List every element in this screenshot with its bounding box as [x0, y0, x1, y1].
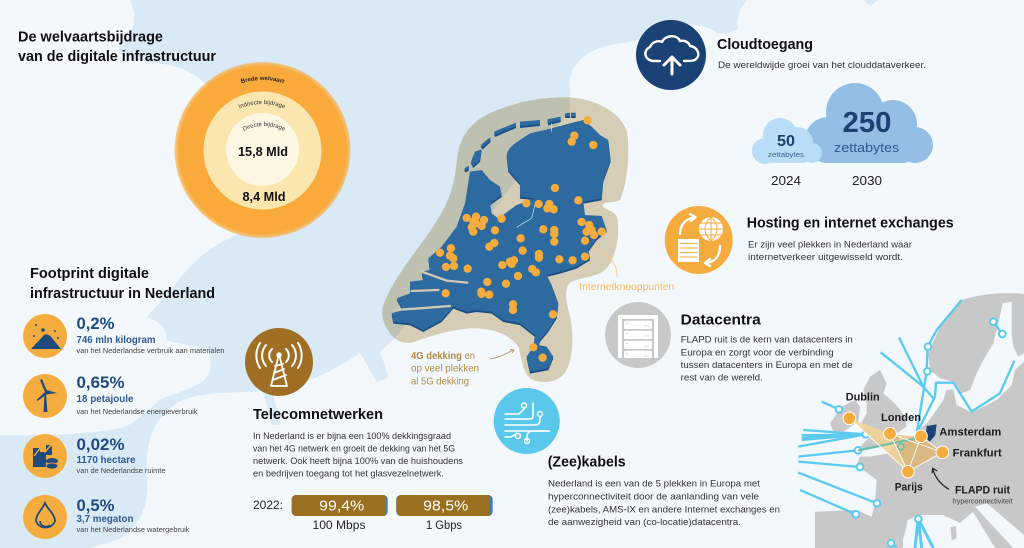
bar: 1 Gbps — [396, 495, 493, 532]
cloud: 250 zettabytes: zettabytes — [834, 140, 900, 155]
bar: 1 Gbps: 98,5% — [423, 498, 468, 515]
panel: cloudtoegang — [636, 20, 933, 188]
panel: datacentra: Datacentra — [681, 311, 761, 328]
map: Europa met kabels en FLAPD ruit — [798, 293, 1024, 548]
footprint row: materialen: van het Nederlandse verbruik aan materialen — [76, 348, 225, 355]
panel: telecomnetwerken: en bedrijven toegang tot het glasvezelnetwerk. — [253, 469, 444, 480]
panel: telecomnetwerken: van het 4G netwerk en groeit de dekking van het 5G — [253, 444, 455, 455]
label: 4G dekking: op veel plekken — [411, 363, 479, 375]
internet nodes — [436, 116, 606, 362]
footprint row: ruimte — [23, 434, 166, 478]
cloud: 50 zettabytes: zettabytes — [768, 150, 804, 159]
concentric circles: welvaartsbijdrage — [174, 62, 350, 238]
footprint row: water — [23, 495, 190, 539]
footprint row: ruimte: van de Nederlandse ruimte — [76, 468, 166, 475]
cable landing points — [836, 318, 1006, 547]
FLAPD diamond — [843, 412, 949, 478]
label: Londen: Londen — [881, 412, 921, 424]
panel: telecomnetwerken: Telecomnetwerken — [253, 406, 383, 423]
cloud: 50 zettabytes: 50 — [777, 133, 795, 150]
panel: cloudtoegang: 2030 — [852, 174, 882, 188]
footprint row: energie: van het Nederlandse energieverbruik — [76, 409, 198, 416]
bar: 100 Mbps: 100 Mbps — [312, 520, 366, 532]
footprint row: ruimte: 0,02% — [76, 435, 124, 454]
footprint row: materialen — [23, 314, 225, 358]
panel: datacentra: Europa en zorgt voor de verbinding — [681, 347, 834, 358]
cloud: 50 zettabytes — [752, 118, 822, 164]
bar: 1 Gbps: 1 Gbps — [426, 520, 462, 532]
land shadow and fill — [392, 113, 611, 374]
panel: telecomnetwerken — [245, 328, 493, 532]
land — [815, 293, 1024, 548]
panel: hosting en internet exchanges: Hosting en internet exchanges — [747, 214, 954, 232]
panel: zeekabels: (Zee)kabels — [548, 454, 626, 471]
panel: hosting en internet exchanges: internetverkeer uitgewisseld wordt. — [748, 252, 903, 263]
concentric circles: welvaartsbijdrage: Brede welvaart — [240, 76, 284, 84]
label: Amsterdam: Amsterdam — [939, 426, 1002, 438]
panel: telecomnetwerken: 2022: — [253, 500, 283, 512]
footprint row: energie — [23, 373, 198, 418]
panel: datacentra: tussen datacenters in Europa en met de — [681, 360, 853, 371]
label: 4G dekking: 4G dekking en — [411, 350, 475, 362]
bar: 100 Mbps: 99,4% — [319, 498, 364, 515]
footprint row: energie: 18 petajoule — [76, 394, 134, 405]
cloud: 250 zettabytes: 250 — [842, 107, 892, 139]
footprint row: ruimte: 1170 hectare — [76, 455, 136, 466]
panel: zeekabels: hyperconnectiviteit door de aanlanding van vele — [548, 491, 759, 502]
panel: datacentra: rest van de wereld. — [681, 373, 763, 384]
icon: zendmast — [245, 328, 313, 396]
bar: 100 Mbps — [292, 495, 388, 532]
heading: footprint: infrastructuur in Nederland — [30, 285, 215, 302]
panel: telecomnetwerken: In Nederland is er bijna een 100% dekkingsgraad — [253, 431, 451, 442]
heading: footprint: Footprint digitale — [30, 265, 149, 282]
footprint row: water: 3,7 megaton — [76, 514, 134, 525]
panel: cloudtoegang: Cloudtoegang — [717, 36, 813, 53]
label: internetknooppunten — [579, 247, 674, 293]
panel: telecomnetwerken: netwerk. Ook heeft bijna 100% van de huishoudens — [253, 456, 463, 467]
icon: cloud upload — [636, 20, 706, 90]
label: 4G dekking: al 5G dekking — [411, 376, 469, 388]
footprint row: materialen: 746 mln kilogram — [76, 335, 156, 346]
heading: footprint — [30, 265, 215, 302]
panel: cloudtoegang: 2024 — [771, 174, 801, 188]
map: Nederland met dekking en knooppunten — [382, 97, 628, 382]
panel: datacentra — [605, 302, 853, 384]
panel: hosting en internet exchanges: Er zijn veel plekken in Nederland waar — [748, 239, 913, 250]
footprint row: water: 0,5% — [76, 496, 114, 515]
cloud: 250 zettabytes — [805, 83, 933, 163]
panel: datacentra: FLAPD ruit is de kern van datacenters in — [681, 335, 853, 346]
label: hyperconnectiviteit: hyperconnectiviteit — [953, 498, 1013, 505]
panel: cloudtoegang: De wereldwijde groei van het clouddataverkeer. — [718, 60, 926, 71]
label: Parijs: Parijs — [895, 481, 923, 493]
footprint row: materialen: 0,2% — [76, 314, 114, 333]
concentric circles: welvaartsbijdrage: Directe bijdrage — [242, 122, 285, 131]
panel: hosting en internet exchanges — [665, 206, 954, 274]
sea cables — [798, 300, 1014, 548]
label: FLAPD ruit: FLAPD ruit — [955, 484, 1010, 496]
panel: zeekabels: de aanwezigheid van (co-locatie)datacentra. — [548, 517, 741, 528]
footprint row: energie: 0,65% — [76, 373, 124, 392]
concentric circles: welvaartsbijdrage: Indirecte bijdrage — [238, 100, 285, 108]
label: Frankfurt: Frankfurt — [953, 448, 1002, 460]
panel: zeekabels — [494, 388, 780, 528]
label: internetknooppunten: Internetknooppunten — [579, 281, 674, 293]
icon: server rack — [605, 302, 671, 368]
icon: kabels — [494, 388, 560, 454]
panel: zeekabels: Nederland is een van de 5 plekken in Europa met — [548, 479, 760, 490]
panel: zeekabels: (zee)kabels, AMS-IX en andere Internet exchanges en — [548, 504, 780, 515]
label: Dublin: Dublin — [846, 392, 880, 404]
concentric circles: welvaartsbijdrage: 15,8 Mld — [238, 144, 288, 159]
label: 4G dekking — [411, 350, 514, 388]
title: van de digitale infrastructuur — [18, 48, 216, 65]
title: De welvaartsbijdrage — [18, 28, 163, 46]
coverage area — [382, 97, 628, 382]
icon: hosting — [665, 206, 733, 274]
concentric circles: welvaartsbijdrage: 8,4 Mld — [242, 189, 286, 204]
title — [18, 28, 216, 65]
footprint row: water: van het Nederlandse watergebruik — [76, 527, 190, 534]
